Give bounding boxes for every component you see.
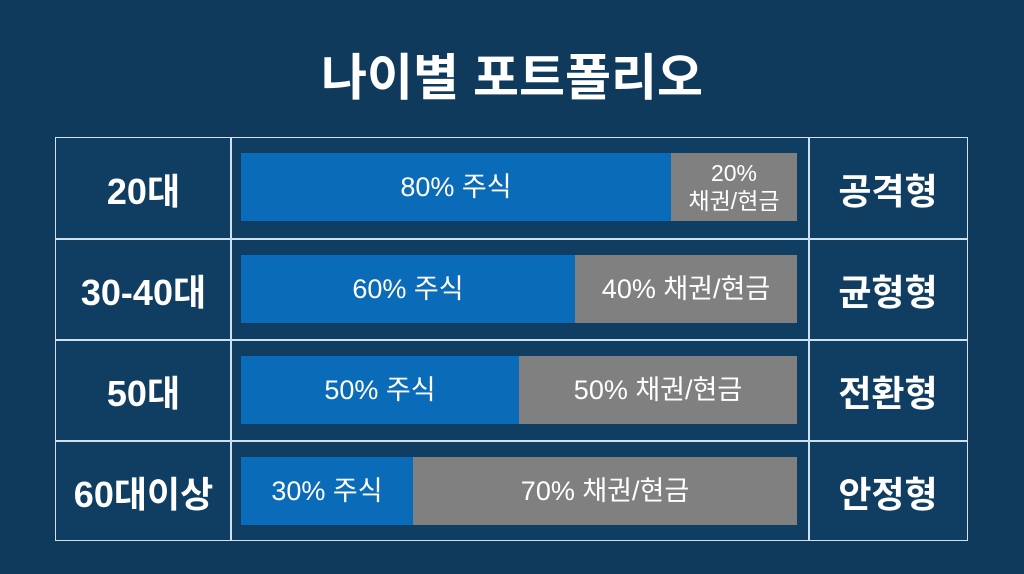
- row 3 type: 전환형: [838, 372, 938, 414]
- row 3 bar: 50% 채권/현금: [574, 375, 742, 405]
- row 1 bar: 20%: [711, 160, 757, 186]
- row 2 type: 균형형: [838, 272, 938, 312]
- row 4 bar: [241, 457, 797, 525]
- row 4 type: 안정형: [838, 474, 938, 514]
- row 2 bar: 60% 주식: [352, 274, 464, 304]
- row 1 bar: [241, 153, 797, 221]
- row 1 bar: 채권/현금: [688, 188, 780, 214]
- row 2 bar: 40% 채권/현금: [602, 274, 770, 304]
- table: [55, 137, 968, 541]
- row 4 bar: 30% 주식: [271, 476, 383, 506]
- row 4 label: 60대이상: [74, 474, 213, 514]
- row 3 bar: [241, 356, 797, 424]
- row 1 label: 20대: [107, 170, 180, 212]
- row 2 bar: [241, 255, 797, 323]
- title: 나이별 포트폴리오: [321, 50, 703, 106]
- row 3 label: 50대: [107, 372, 180, 414]
- row 2 label: 30-40대: [81, 272, 206, 312]
- row 3 bar: 50% 주식: [324, 375, 436, 405]
- row 1 bar: 80% 주식: [400, 172, 512, 202]
- row 4 bar: 70% 채권/현금: [521, 476, 689, 506]
- row 1 type: 공격형: [838, 170, 938, 212]
